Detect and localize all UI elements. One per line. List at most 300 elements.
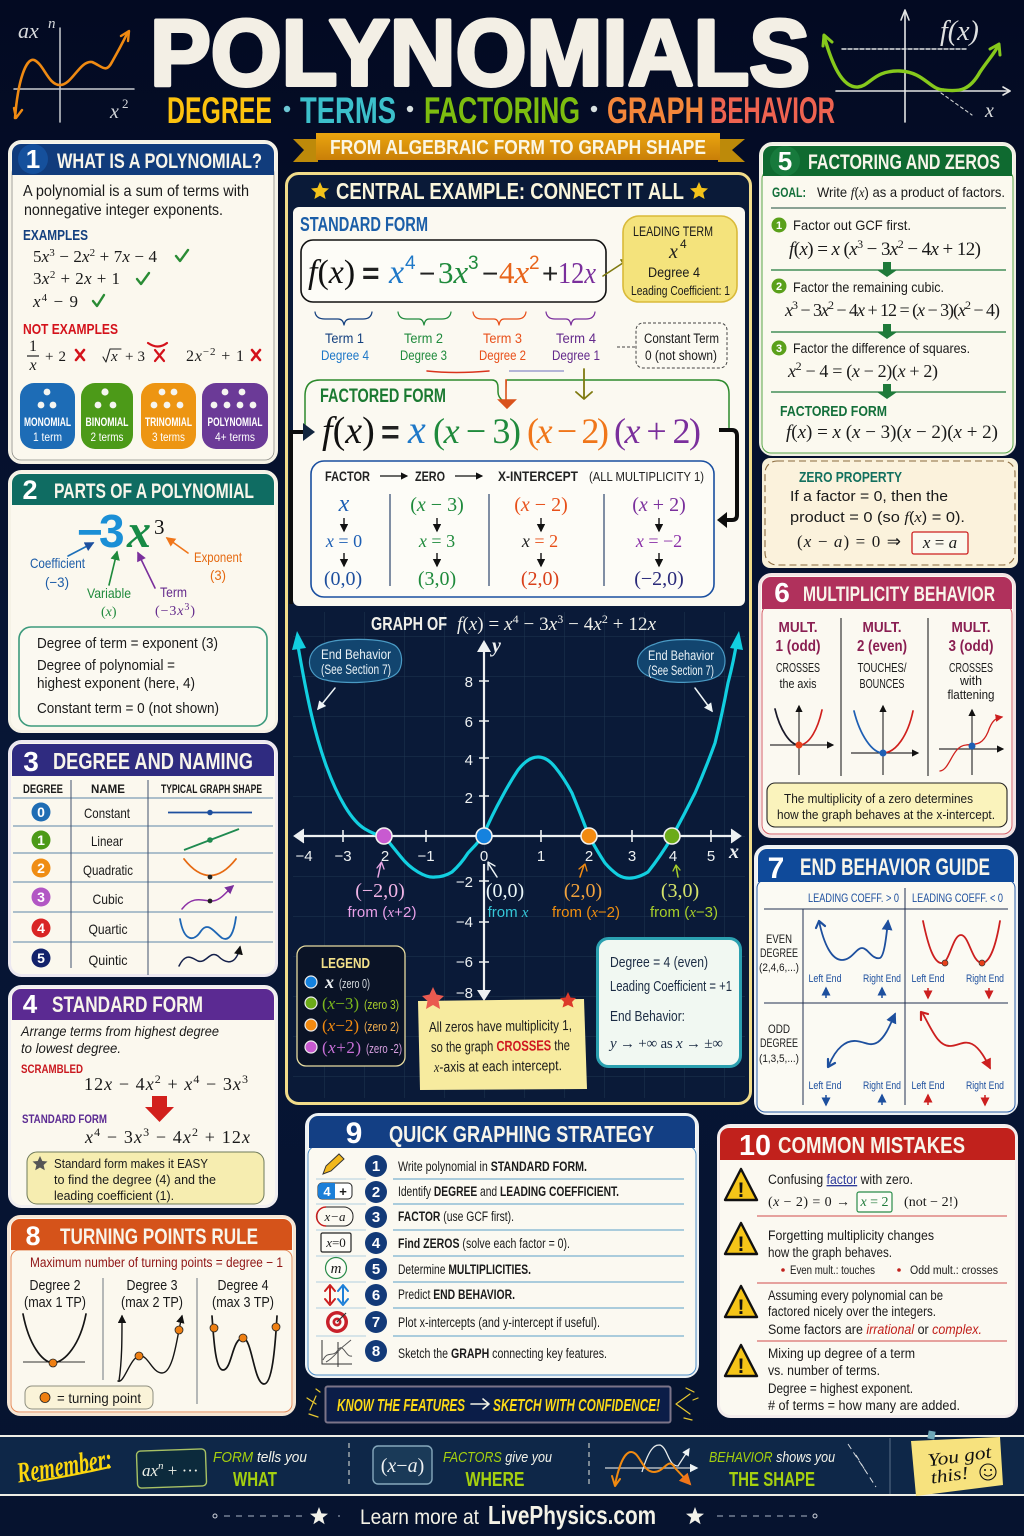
standard form: 2 [529, 253, 540, 274]
not examples: 1 [29, 338, 37, 355]
turning column: degree 4: Degree 4 [218, 1278, 268, 1294]
legend: (zero 0) [339, 976, 370, 991]
tile: polynomial: 4+ terms [215, 430, 255, 444]
scrambled equation: x [232, 1074, 241, 1094]
axis labels: 4 [669, 848, 677, 865]
row: constant: Constant [84, 805, 130, 821]
table head: TYPICAL GRAPH SHAPE [161, 784, 262, 796]
arrowhead right [730, 631, 743, 650]
step 5 [326, 1258, 531, 1280]
anatomy labels: 3 [184, 602, 189, 613]
instruction [20, 1023, 219, 1056]
standard equation: 2 [192, 1125, 198, 1139]
mult 2 column: TOUCHES/ [858, 661, 907, 675]
subtitle: topics: GRAPH [607, 90, 704, 131]
curve [297, 640, 737, 878]
leading term box: x [668, 241, 678, 263]
standard form: STANDARD FORM [300, 214, 428, 236]
legend: (x−3) [322, 994, 359, 1013]
standard equation: x [84, 1127, 93, 1147]
step 1: 3 [857, 237, 863, 251]
legend [297, 946, 405, 1066]
sticky note: you got this: this! [929, 1462, 970, 1488]
constant term box: 0 (not shown) [645, 348, 717, 363]
even positive [808, 921, 901, 998]
constant term box [617, 323, 727, 368]
axis labels: y [490, 635, 501, 657]
scrambled equation [21, 1062, 248, 1094]
step 2: 2 [965, 298, 971, 312]
examples: + 2 [56, 269, 84, 288]
icon: green polynomial graph with axes: f(x) [940, 16, 979, 47]
zeros [376, 828, 680, 844]
mult 3 column: flattening [948, 688, 995, 702]
white example area [293, 207, 745, 606]
axis labels: −2 [456, 874, 473, 891]
anatomy term: 3 [154, 515, 164, 539]
end behavior summary box: Leading Coefficient = +1 [610, 979, 732, 995]
step 2: 3 [792, 298, 798, 312]
behavior caption: THE SHAPE [729, 1469, 815, 1491]
tile: polynomial [202, 383, 268, 449]
term 4 label [546, 312, 600, 363]
axis labels: 2 [465, 790, 473, 807]
leading term box [623, 216, 737, 302]
row label: even degree: (2,4,6,...) [759, 962, 799, 974]
end behavior summary box: y → +∞ as x → ±∞ [608, 1036, 723, 1052]
goal: Write f(x) as a product of factors. [817, 184, 1005, 201]
intercept label -2: from (x+2) [348, 904, 416, 921]
standard equation: x [241, 1127, 250, 1147]
step 1: 1 [776, 220, 782, 232]
axis labels: −3 [334, 848, 352, 865]
form caption: FORM tells you [213, 1449, 308, 1466]
graph equation: x [548, 614, 558, 635]
banner: know the features: KNOW THE FEATURES [337, 1395, 465, 1415]
icon: orange polynomial graph with axes: x [109, 101, 119, 123]
step 6: 6 [372, 1287, 380, 1304]
tile: monomial: MONOMIAL [24, 417, 71, 429]
turning column: degree 4: (max 3 TP) [212, 1295, 274, 1311]
axis labels: 6 [465, 714, 473, 731]
not examples: x [28, 357, 37, 374]
term 1 label: Degree 4 [321, 347, 369, 363]
mistake 4: ! [738, 1355, 744, 1378]
factored equation: (x − 3) [433, 411, 521, 451]
legend: turning point: = turning point [57, 1390, 141, 1406]
not examples: + 2 [45, 349, 66, 365]
tile: trinomial: TRINOMIAL [145, 417, 192, 429]
step 8: Sketch the GRAPH connecting key features. [398, 1346, 607, 1361]
arrow: black left loop [291, 423, 315, 604]
even negative [912, 921, 1004, 998]
not examples: 2x [186, 348, 202, 365]
end behavior summary box: End Behavior: [610, 1009, 685, 1025]
factored result: FACTORED FORM [780, 403, 887, 420]
not examples: NOT EXAMPLES [23, 321, 118, 338]
anatomy labels [30, 549, 242, 620]
mult 1 column: the axis [780, 677, 816, 691]
mistake 3 [725, 1286, 982, 1337]
term 1 label [315, 312, 372, 363]
sticky note: you got this [911, 1431, 1003, 1496]
standard equation: x [133, 1127, 142, 1147]
standard form: 3x [438, 255, 468, 291]
standard form: 4 [405, 253, 416, 274]
factor zero intercept table [311, 461, 714, 597]
step 2 [318, 1181, 619, 1203]
factored result: f(x) = x (x − 3)(x − 2)(x + 2) [786, 422, 998, 443]
tile: monomial: 1 term [33, 430, 62, 444]
anatomy labels: Coefficient [30, 555, 85, 571]
note box: Standard form makes it EASY [54, 1156, 208, 1171]
mistake 2: how the graph behaves. [768, 1245, 892, 1260]
step 6: Predict END BEHAVIOR. [398, 1287, 515, 1302]
axis labels: −4 [456, 914, 473, 931]
header 2: 2 [22, 475, 38, 505]
scrambled equation: 4 [193, 1072, 199, 1086]
header 5 [763, 146, 1012, 176]
degree summary box: Constant term = 0 (not shown) [37, 700, 219, 717]
term 2 label: Degree 3 [400, 347, 447, 363]
axis labels: −8 [456, 985, 473, 1002]
instruction: Arrange terms from highest degree [20, 1023, 219, 1039]
column: x-2 [514, 494, 568, 590]
factor zero intercept table: ZERO [415, 468, 445, 484]
intercept label 0 [486, 862, 529, 921]
standard equation: 3 [143, 1125, 149, 1139]
axis labels: 2 [585, 848, 593, 865]
column: x-2: (x − 2) [514, 494, 568, 516]
term 4 label: Term 4 [556, 330, 596, 346]
step 2: + [339, 1184, 347, 1199]
anatomy labels: (−3) [45, 574, 69, 590]
term 2 label [398, 312, 451, 363]
mistake 2: ! [738, 1233, 744, 1256]
intercept label 0: from x [488, 904, 529, 921]
factor zero intercept table: (ALL MULTIPLICITY 1) [589, 469, 704, 484]
scrambled equation: SCRAMBLED [21, 1062, 83, 1076]
arrowhead left [292, 631, 306, 650]
step 2: 2 [828, 298, 834, 312]
intercept label 2: (2,0) [564, 880, 602, 902]
graph title: GRAPH OF [371, 614, 447, 634]
table head: NAME [91, 782, 125, 796]
row: quintic [32, 947, 240, 968]
not examples: x [110, 349, 118, 365]
icon: green polynomial graph with axes: x [984, 100, 994, 122]
arrow: red to factored form [499, 380, 515, 408]
legend: (zero 2) [364, 1019, 399, 1034]
icon: orange polynomial graph with axes: ax [18, 18, 39, 43]
scrambled equation: 12x − 4x [84, 1074, 154, 1094]
form caption: WHAT [233, 1469, 277, 1491]
panel 4: standard form [10, 986, 276, 1206]
axis labels: 4 [465, 752, 473, 769]
factors caption: WHERE [466, 1469, 524, 1491]
graph equation: f(x) = x [457, 614, 513, 635]
panel 8: turning points rule [8, 1216, 294, 1414]
not examples: + 3 [125, 349, 145, 365]
subtitle: topics: DEGREE [167, 90, 272, 131]
mistake 1 [725, 1169, 958, 1212]
turning column: degree 2: Degree 2 [30, 1278, 80, 1294]
step 2: − 4 [833, 300, 858, 320]
term 3 label [473, 312, 526, 363]
factored form outline [305, 380, 729, 430]
header 8 [11, 1219, 292, 1251]
footer: learn more [213, 1500, 817, 1530]
footer: learn more: LivePhysics.com [488, 1500, 656, 1530]
legend: LEGEND [321, 955, 370, 972]
step 2: 2 [372, 1184, 380, 1201]
row: quartic [32, 917, 236, 939]
arrow: red down [145, 1096, 174, 1122]
axis labels: 1 [537, 848, 545, 865]
even positive: Left End [808, 973, 842, 985]
step 1: − 3 [863, 239, 890, 260]
header 1 [12, 144, 274, 175]
odd negative: Left End [912, 1080, 944, 1092]
step 3: 3 [776, 343, 782, 355]
factored equation: f(x) [322, 410, 375, 452]
anatomy labels: ) [190, 604, 195, 619]
banner: know the features [326, 1386, 670, 1422]
mult 3 column: 3 (odd) [948, 638, 994, 655]
examples: x [81, 247, 90, 266]
legend: (zero 3) [364, 997, 399, 1012]
column: x+2: (x + 2) [632, 494, 686, 516]
even negative: Left End [912, 973, 944, 985]
examples: x + 1 [84, 269, 120, 288]
row: quintic: Quintic [88, 952, 128, 968]
examples: EXAMPLES [23, 227, 88, 244]
behavior caption: BEHAVIOR shows you [709, 1449, 836, 1466]
turning column: degree 2: (max 1 TP) [24, 1295, 86, 1311]
note box: leading coefficient (1). [54, 1188, 174, 1203]
rule text: Maximum number of turning points = degree − 1 [30, 1255, 283, 1270]
step 3 [771, 340, 1006, 399]
standard form: + [542, 258, 558, 289]
column: x+2 [632, 494, 686, 590]
mult 2 column: MULT. [862, 619, 902, 636]
column: x-3: (3,0) [418, 568, 456, 590]
mistake 2: Even mult.: touches [790, 1265, 875, 1277]
panel 5: factoring and zeros [760, 144, 1014, 454]
step 1: Factor out GCF first. [793, 217, 911, 233]
mult 1 column [770, 619, 833, 775]
graph equation: − 3 [519, 614, 549, 635]
step 3: 2 [796, 359, 802, 373]
step 1: x + 12) [931, 239, 981, 260]
table head [23, 782, 262, 796]
intercept label 3 [650, 865, 718, 921]
sticky note: multiplicity: so the graph CROSSES the [431, 1038, 570, 1056]
turning column: degree 4 [210, 1278, 280, 1384]
row: cubic [32, 886, 233, 909]
step 2: Identify DEGREE and LEADING COEFFICIENT. [398, 1184, 619, 1199]
sticky note: multiplicity [418, 987, 587, 1090]
icon: green polynomial graph with axes [823, 10, 1010, 122]
step 8: 8 [372, 1343, 380, 1360]
axis labels [295, 635, 739, 1002]
callout: end behavior right [638, 640, 725, 711]
column: x-3: (x − 3) [410, 494, 464, 516]
term 3 label: Term 3 [483, 330, 522, 346]
scrambled equation: + [162, 1074, 183, 1094]
standard form [300, 214, 606, 302]
intercept label 3: from (x−3) [650, 904, 718, 921]
arrow: black right loop [717, 430, 737, 528]
sparks [307, 1388, 698, 1420]
step 1: − 4 [903, 239, 932, 260]
standard form: f(x) [308, 254, 355, 291]
column: x: (0,0) [324, 568, 362, 590]
odd negative [912, 1012, 1004, 1105]
standard form: − [482, 258, 498, 289]
turning column: degree 2 [23, 1278, 86, 1367]
header 3: DEGREE AND NAMING [53, 748, 253, 774]
definition text: nonnegative integer exponents. [24, 202, 223, 219]
zero property box: x = a [922, 533, 957, 552]
step 2: − 3 [797, 300, 822, 320]
term 3 label: Degree 2 [479, 347, 526, 363]
callout: end behavior left [309, 639, 402, 709]
row: constant: 0 [37, 804, 45, 820]
header 9 [309, 1116, 695, 1150]
step 2: x [784, 300, 793, 320]
mistake 4: Mixing up degree of a term [768, 1346, 915, 1361]
anatomy term: x [126, 505, 151, 558]
header 2 [12, 474, 274, 505]
row: constant [32, 802, 252, 822]
mistake 4: vs. number of terms. [768, 1363, 880, 1378]
step 3: Factor the difference of squares. [793, 340, 970, 356]
header 3 [12, 744, 274, 777]
leading term box: Leading Coefficient: 1 [631, 283, 730, 298]
factor zero intercept table: X-INTERCEPT [498, 468, 578, 484]
tile: monomial [20, 383, 75, 449]
degree summary box: highest exponent (here, 4) [37, 675, 195, 692]
definition text: A polynomial is a sum of terms with [23, 183, 249, 200]
header 8: 8 [25, 1221, 41, 1251]
even negative: Right End [966, 973, 1004, 985]
step 2: 4 [323, 1184, 331, 1199]
table head: DEGREE [23, 782, 63, 796]
legend: turning point [25, 1386, 153, 1409]
step 7: 7 [372, 1314, 380, 1331]
panel 1: what is a polynomial [10, 142, 276, 462]
mistake 3: factored nicely over the integers. [768, 1304, 936, 1319]
remember band [0, 1431, 1024, 1496]
mult 1 column: MULT. [778, 619, 818, 636]
graph equation: − 4 [563, 614, 594, 635]
row: linear: 1 [37, 832, 45, 848]
title: POLYNOMIALS [150, 0, 810, 105]
zero property box: ZERO PROPERTY [799, 469, 902, 486]
column: x-2: (2,0) [521, 568, 559, 590]
form box: n [158, 1460, 164, 1472]
term 2 label: Term 2 [404, 330, 443, 346]
anatomy labels: Term [160, 584, 187, 600]
mult 2 column: 2 (even) [857, 638, 907, 655]
axes [294, 640, 741, 1001]
factors box [373, 1446, 432, 1484]
remember lettering [14, 1443, 114, 1490]
sticky note: multiplicity: x-axis at each intercept. [433, 1058, 562, 1076]
panel 7: end behavior guide [756, 846, 1016, 1114]
row label: odd degree [759, 1022, 799, 1065]
not examples [23, 321, 260, 374]
header 9: QUICK GRAPHING STRATEGY [389, 1121, 654, 1147]
mult 1 column: CROSSES [776, 661, 820, 675]
arrow: to leading term [603, 259, 629, 276]
row: cubic: Cubic [92, 891, 124, 907]
step 1: Write polynomial in STANDARD FORM. [398, 1159, 587, 1174]
header 7 [758, 849, 1014, 885]
step 2: x + 12 = (x − 3)(x [857, 300, 966, 320]
examples: − 9 [48, 292, 78, 311]
factored equation [322, 407, 701, 452]
row: quartic: 4 [37, 920, 45, 936]
mistake 1: (not − 2!) [904, 1195, 958, 1210]
step 3: x [787, 361, 796, 381]
legend: x [324, 972, 334, 992]
header 1: 1 [26, 144, 40, 174]
degree summary box [19, 627, 267, 726]
not examples: −2 [203, 346, 215, 358]
end behavior summary box: Degree = 4 (even) [610, 955, 708, 971]
row: quadratic: Quadratic [83, 862, 133, 878]
scrambled equation: x [183, 1074, 192, 1094]
sticky note: you got this: You got [926, 1442, 994, 1470]
standard form: = [362, 257, 380, 290]
standard equation: + 12 [199, 1127, 241, 1147]
factored result [780, 403, 998, 443]
examples: 2 [90, 247, 95, 259]
behavior caption [709, 1449, 836, 1491]
odd positive: Left End [808, 1080, 842, 1092]
instruction: to lowest degree. [21, 1040, 121, 1056]
odd positive [808, 1014, 901, 1105]
not examples: + 1 [216, 348, 244, 365]
step 3: 3 [372, 1209, 380, 1226]
header 4: STANDARD FORM [52, 992, 203, 1017]
step 5: 5 [372, 1261, 380, 1278]
axis labels: 3 [628, 848, 636, 865]
standard equation: − 4 [150, 1127, 182, 1147]
mult 3 column: with [959, 674, 982, 688]
row label: even degree [759, 932, 799, 974]
zero property box [762, 458, 1018, 568]
column: x-3 [410, 494, 464, 590]
row: cubic: 3 [37, 889, 45, 905]
header 9: 9 [346, 1117, 362, 1150]
column heads: LEADING COEFF. > 0 [808, 891, 899, 905]
goal [771, 184, 1006, 208]
header 10 [720, 1128, 1015, 1162]
row: quadratic: 2 [37, 860, 45, 876]
step 4: x=0 [325, 1235, 346, 1250]
intercept label -2 [348, 862, 416, 921]
anatomy term [77, 505, 164, 558]
panel: central example [286, 174, 750, 1104]
row label: odd degree: DEGREE [760, 1036, 798, 1050]
intercept label -2: (−2,0) [355, 880, 405, 902]
row: linear: Linear [91, 833, 123, 849]
step 3: x − 2)(x + 2) [852, 361, 938, 381]
footer: learn more: Learn more at [360, 1506, 479, 1529]
